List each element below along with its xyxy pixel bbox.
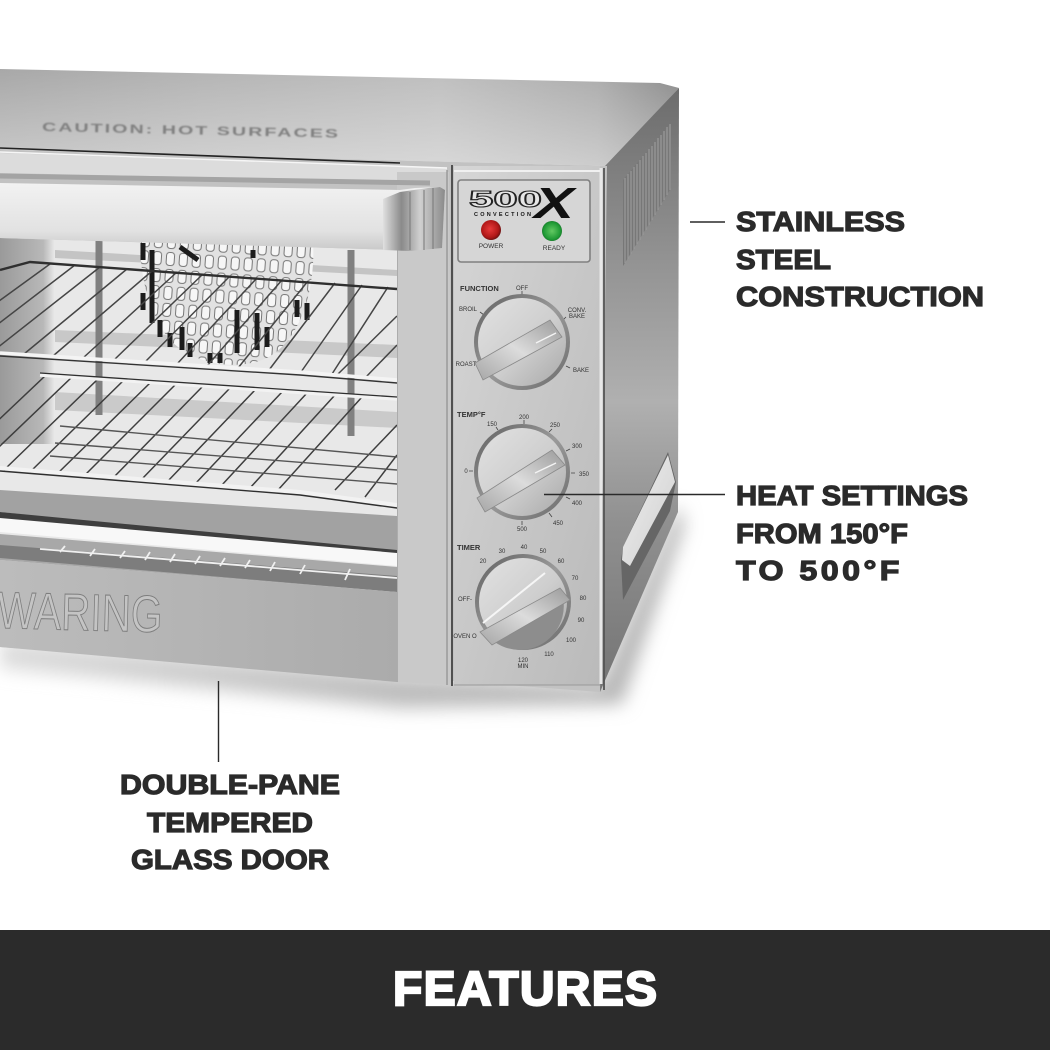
logo badge	[458, 179, 590, 262]
side handle	[621, 452, 676, 600]
timer scale labels: MIN	[518, 664, 528, 670]
temperature scale labels: 150	[487, 422, 498, 428]
door top gap	[0, 148, 400, 163]
temperature scale labels: 250	[550, 423, 561, 429]
door handle	[0, 176, 445, 251]
timer scale labels: 100	[566, 638, 577, 644]
timer scale labels: 120	[518, 658, 529, 664]
timer scale labels	[453, 545, 587, 670]
function scale labels: CONV.	[568, 308, 587, 314]
embossed warning text: CAUTION: HOT SURFACES	[42, 122, 340, 141]
temperature dial	[457, 410, 590, 533]
callout: stainless steel construction: STEEL	[736, 244, 831, 275]
timer dark half	[492, 588, 564, 650]
function scale labels: BROIL	[459, 307, 478, 313]
temperature scale labels: 400	[572, 501, 583, 507]
temperature heading: TEMP°F	[457, 410, 486, 419]
temperature scale labels: 450	[553, 521, 564, 527]
footer banner	[0, 930, 1050, 1050]
function scale labels: ROAST	[456, 362, 477, 368]
convection fan grille	[140, 240, 313, 365]
function dial	[456, 284, 589, 390]
callout: double-pane tempered glass door: GLASS DOOR	[131, 844, 329, 875]
callout: stainless steel construction: STAINLESS	[736, 206, 905, 237]
callout: heat settings	[736, 480, 968, 586]
door bottom band with logo	[0, 560, 397, 682]
callout: double-pane tempered glass door: DOUBLE-PANE	[120, 769, 340, 800]
oven window	[0, 235, 397, 595]
callout: double-pane tempered glass door: TEMPERED	[147, 807, 313, 838]
function scale labels	[456, 286, 589, 374]
oven floor shadow	[0, 505, 684, 708]
callout: stainless steel construction: CONSTRUCTION	[736, 281, 984, 312]
lower rack rails	[0, 373, 397, 508]
callout line: glass door	[218, 681, 220, 762]
timer scale labels: 70	[572, 576, 579, 582]
callout line: heat settings	[544, 494, 725, 496]
oven top surface	[0, 69, 679, 166]
control panel	[453, 166, 604, 690]
temperature knob	[477, 450, 565, 512]
500 logo: 500	[469, 186, 542, 212]
door frame and front	[0, 148, 607, 692]
ready light	[542, 221, 562, 241]
timer scale labels: OVEN O	[453, 634, 477, 640]
ready label: READY	[543, 245, 566, 252]
timer knob	[480, 588, 570, 645]
function heading: FUNCTION	[460, 284, 499, 293]
side vents	[623, 123, 671, 266]
timer scale labels: 50	[540, 549, 547, 555]
timer scale labels: OFF-	[458, 597, 472, 603]
callout: heat settings: FROM 150°F	[736, 518, 908, 549]
timer scale labels: 20	[480, 559, 487, 565]
temperature scale labels	[464, 415, 590, 533]
function scale labels: OFF	[516, 286, 528, 292]
timer scale labels: 110	[544, 652, 554, 658]
footer title: FEATURES	[393, 963, 657, 1016]
temperature scale labels: 350	[579, 472, 590, 478]
temperature scale labels: 300	[572, 444, 583, 450]
right door column	[397, 172, 453, 685]
oven illustration	[0, 69, 679, 692]
embossed brand name: WARING	[0, 582, 163, 644]
function scale labels: BAKE	[569, 314, 585, 320]
upper rack rails	[0, 262, 397, 383]
bottom rack	[40, 546, 397, 580]
oven side panel	[600, 88, 679, 692]
callout: stainless steel construction	[736, 206, 984, 312]
lower rack wires	[0, 376, 397, 497]
timer scale labels: 90	[578, 618, 585, 624]
timer scale labels: 30	[499, 549, 506, 555]
power light	[481, 220, 501, 240]
temperature scale labels: 500	[517, 527, 528, 533]
callout line: stainless steel	[690, 221, 725, 223]
callout: heat settings: TO 500°F	[736, 556, 903, 586]
temperature scale labels: 0	[464, 469, 468, 475]
timer scale labels: 80	[580, 596, 587, 602]
callout: heat settings: HEAT SETTINGS	[736, 480, 968, 511]
handle end cap	[383, 187, 445, 251]
callout: double-pane tempered glass door	[120, 769, 340, 875]
X logo: X	[530, 179, 578, 228]
convection logo label: CONVECTION	[474, 212, 531, 218]
oven back posts	[99, 238, 351, 436]
function knob	[475, 320, 562, 380]
function scale labels: BAKE	[573, 368, 589, 374]
timer heading: TIMER	[457, 543, 481, 552]
temperature scale labels: 200	[519, 415, 530, 421]
power label: POWER	[479, 243, 504, 250]
timer dial	[453, 543, 587, 670]
timer scale labels: 40	[521, 545, 528, 551]
timer scale labels: 60	[558, 559, 565, 565]
upper rack wires	[0, 264, 397, 378]
